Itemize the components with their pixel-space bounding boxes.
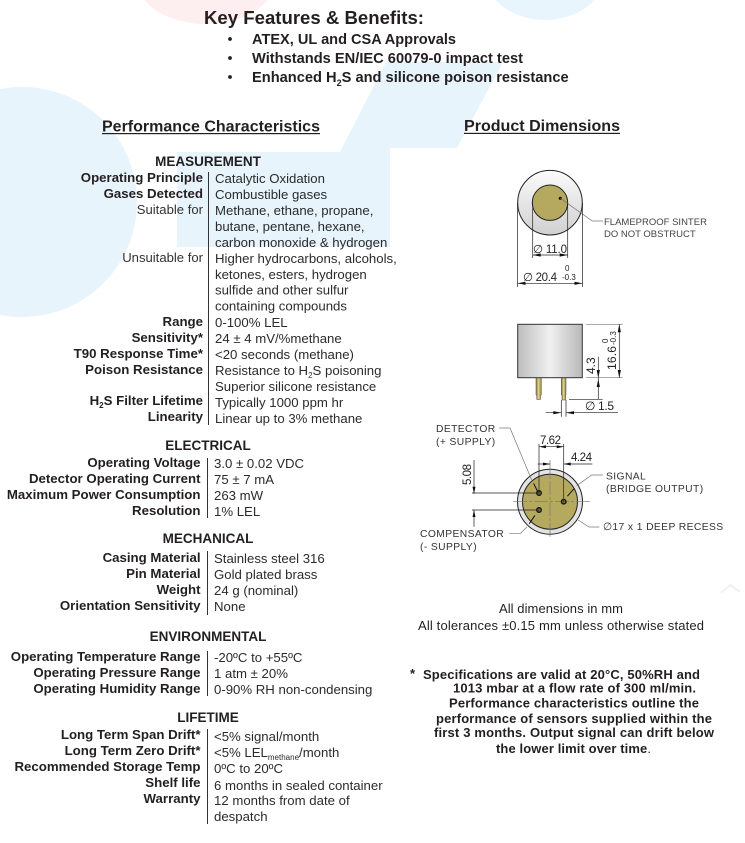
row: long term zero drift: <5% LEL [214,745,268,760]
row: operating principle: Operating Principle [81,170,203,185]
row: recommended storage temp: 0ºC to 20ºC [214,761,283,776]
row: poison resistance: 2 [308,371,313,380]
row: operating temperature range: Operating Temperature Range [11,649,200,664]
row: suitable for: carbon monoxide & hydrogen [215,235,387,250]
row: resolution [132,503,260,519]
row: linearity: Linear up to 3% methane [215,411,362,426]
row: sensitivity: Sensitivity* [132,330,204,345]
row: casing material: Casing Material [103,550,200,565]
row: long term span drift [61,727,319,744]
row: unsuitable for: ketones, esters, hydrogen [215,267,367,282]
row: linearity [148,409,362,426]
text block: specifications footnote: Specifications are valid at 20°C, 50%RH and [423,667,700,682]
panel: measurement [74,154,397,426]
dimension: 5.08: 5.08 [462,464,474,485]
row: t90 response time: <20 seconds (methane) [215,347,354,362]
row: warranty: despatch [214,809,268,824]
row: suitable for: Methane, ethane, propane, [215,203,373,218]
panel: mechanical [60,531,325,615]
row: resolution: 1% LEL [214,504,260,519]
row: suitable for: butane, pentane, hexane, [215,219,365,234]
text block: specifications footnote: performance of sensors supplied within the [436,711,712,726]
label: detector: DETECTOR [436,424,496,435]
row: h2s filter lifetime: 2 [99,401,104,410]
dimension: 4.3: 4.3 [584,357,598,374]
row: operating humidity range: Operating Humidity Range [33,681,200,696]
dimension: 16.6: 16.6 [605,346,619,370]
row: operating voltage: Operating Voltage [87,455,200,470]
diagram: side view [518,324,623,417]
row: unsuitable for: Unsuitable for [122,250,204,265]
label: compensator [420,529,504,553]
row: long term span drift: Long Term Span Drift* [61,727,201,742]
feature: poison resistance: S and silicone poison resistance [342,70,569,86]
row: h2s filter lifetime: S Filter Lifetime [104,393,203,408]
row: operating pressure range: 1 atm ± 20% [214,666,288,681]
row: unsuitable for: containing compounds [215,298,347,314]
row: operating pressure range [33,665,288,681]
row: poison resistance: Poison Resistance [85,362,203,377]
row: t90 response time [74,346,354,362]
heading: electrical: ELECTRICAL [165,438,251,453]
row: linearity: Linearity [148,409,204,424]
text block: specifications footnote: the lower limit over time. [496,741,651,756]
row: pin material [126,566,318,582]
row: shelf life [145,775,383,793]
icon: flameproof sinter [532,185,568,220]
text block: specifications footnote: 1013 mbar at a flow rate of 300 ml/min. [453,680,696,696]
row: operating pressure range: Operating Pressure Range [33,665,200,680]
row: range: 0-100% LEL [215,315,288,330]
text block: specifications footnote: Performance characteristics outline the [449,696,699,710]
dimension: 20.4: 0 [565,264,570,273]
icon: pins [537,491,566,512]
row: unsuitable for: Higher hydrocarbons, alcohols, [215,251,397,266]
row: weight [157,582,298,598]
row: operating temperature range: -20ºC to +55ºC [214,650,303,665]
row: suitable for: Suitable for [137,202,204,217]
row: suitable for [137,202,387,250]
label: detector [436,424,496,448]
dimension: 1.5: ∅ 1.5 [585,399,614,413]
row: poison resistance: Superior silicone resistance [215,379,376,394]
label: flameproof sinter: FLAMEPROOF SINTER [604,217,707,228]
feature list [228,32,569,88]
row: warranty [144,791,350,824]
row: orientation sensitivity: None [214,599,246,614]
row: operating humidity range [33,681,372,697]
panel: environmental [11,629,372,697]
label: compensator: (- SUPPLY) [420,542,477,553]
feature: poison resistance: Enhanced H [252,70,337,86]
row: pin material: Pin Material [126,566,200,581]
label: signal: SIGNAL [606,472,646,482]
dimension: 4.24: 4.24 [571,452,593,464]
row: range: Range [162,314,203,329]
dimension: 16.6 [601,331,619,370]
row: shelf life: Shelf life [145,775,200,790]
row: weight: 24 g (nominal) [214,583,298,598]
row: recommended storage temp [14,759,283,776]
label: detector: (+ SUPPLY) [436,437,496,448]
heading: environmental: ENVIRONMENTAL [150,629,266,644]
text block: dimensions note: All dimensions in mm [499,601,623,616]
row: maximum power consumption: 263 mW [214,488,264,503]
row: shelf life: 6 months in sealed container [214,778,383,793]
row: unsuitable for: sulfide and other sulfur [215,282,349,298]
row: detector operating current [29,471,274,487]
icon: pin right [561,378,566,400]
dimension: 20.4: -0.3 [562,273,576,282]
text block: specifications footnote: * [410,666,416,681]
row: casing material: Stainless steel 316 [214,551,325,566]
panel: lifetime [14,710,383,824]
row: unsuitable for [122,250,397,314]
row: long term span drift: <5% signal/month [214,729,319,744]
row: orientation sensitivity: Orientation Sensitivity [60,598,201,613]
dimension: 7.62: 7.62 [540,435,561,447]
row: poison resistance: S poisoning [313,363,381,378]
diagram: bottom view [420,424,724,553]
row: recommended storage temp: Recommended Storage Temp [14,759,200,774]
label: signal [606,472,704,495]
title: key features: Key Features & Benefits: [204,7,424,28]
row: maximum power consumption: Maximum Power Consumption [7,487,200,502]
row: range [162,314,288,330]
label: flameproof sinter [604,217,707,240]
dimension: 16.6: 0 [601,338,610,343]
row: resolution: Resolution [132,503,200,518]
row: weight: Weight [157,582,201,597]
text block: specifications footnote [410,666,715,756]
panel: electrical [7,438,305,519]
heading: performance characteristics: Performance Characteristics [102,118,320,136]
icon: pin left [536,378,541,400]
row: warranty: Warranty [144,791,201,806]
feature: poison resistance [228,70,569,88]
feature: approvals: ATEX, UL and CSA Approvals [252,32,456,48]
row: poison resistance: Resistance to H [215,363,308,378]
row: h2s filter lifetime: H [90,393,99,408]
text block: dimensions note [418,601,704,633]
row: poison resistance [85,362,381,394]
row: operating principle [81,170,325,186]
row: operating principle: Catalytic Oxidation [215,171,325,186]
feature: impact test: Withstands EN/IEC 60079-0 impact test [252,51,523,67]
row: detector operating current: Detector Operating Current [29,471,201,486]
row: long term zero drift: Long Term Zero Drift* [65,743,201,758]
row: t90 response time: T90 Response Time* [74,346,204,361]
row: warranty: 12 months from date of [214,793,350,808]
row: long term zero drift [65,743,339,762]
row: sensitivity [132,330,342,346]
row: pin material: Gold plated brass [214,567,318,582]
row: h2s filter lifetime: Typically 1000 ppm hr [215,395,344,410]
row: gases detected [104,186,328,202]
diagram: top view [518,170,707,287]
row: gases detected: Combustible gases [215,187,328,202]
feature: poison resistance: 2 [337,78,342,88]
label: signal: (BRIDGE OUTPUT) [606,484,704,495]
row: casing material [103,550,325,566]
text block: specifications footnote: first 3 months. Output signal can drift below [434,725,715,740]
label: compensator: COMPENSATOR [420,529,504,540]
row: long term zero drift: /month [299,745,339,760]
heading: mechanical: MECHANICAL [163,531,253,546]
heading: product dimensions: Product Dimensions [464,118,620,135]
row: operating humidity range: 0-90% RH non-condensing [214,682,372,697]
dimension: 11.0: ∅ 11.0 [533,244,567,256]
dimension: 16.6: -0.3 [609,331,618,345]
row: long term zero drift: methane [268,753,300,762]
row: detector operating current: 75 ± 7 mA [214,472,274,487]
row: operating voltage: 3.0 ± 0.02 VDC [214,456,305,471]
row: sensitivity: 24 ± 4 mV/%methane [215,331,342,346]
heading: lifetime: LIFETIME [177,710,239,725]
row: gases detected: Gases Detected [104,186,203,201]
text block: dimensions note: All tolerances ±0.15 mm unless otherwise stated [418,618,704,633]
dimension: 20.4 [523,264,576,284]
row: h2s filter lifetime [90,393,344,410]
label: recess: ∅17 x 1 DEEP RECESS [603,522,724,533]
row: operating temperature range [11,649,303,665]
dimension: 20.4: ∅ 20.4 [523,272,558,284]
heading: measurement: MEASUREMENT [155,154,262,169]
row: operating voltage [87,455,305,471]
label: flameproof sinter: DO NOT OBSTRUCT [604,229,696,240]
